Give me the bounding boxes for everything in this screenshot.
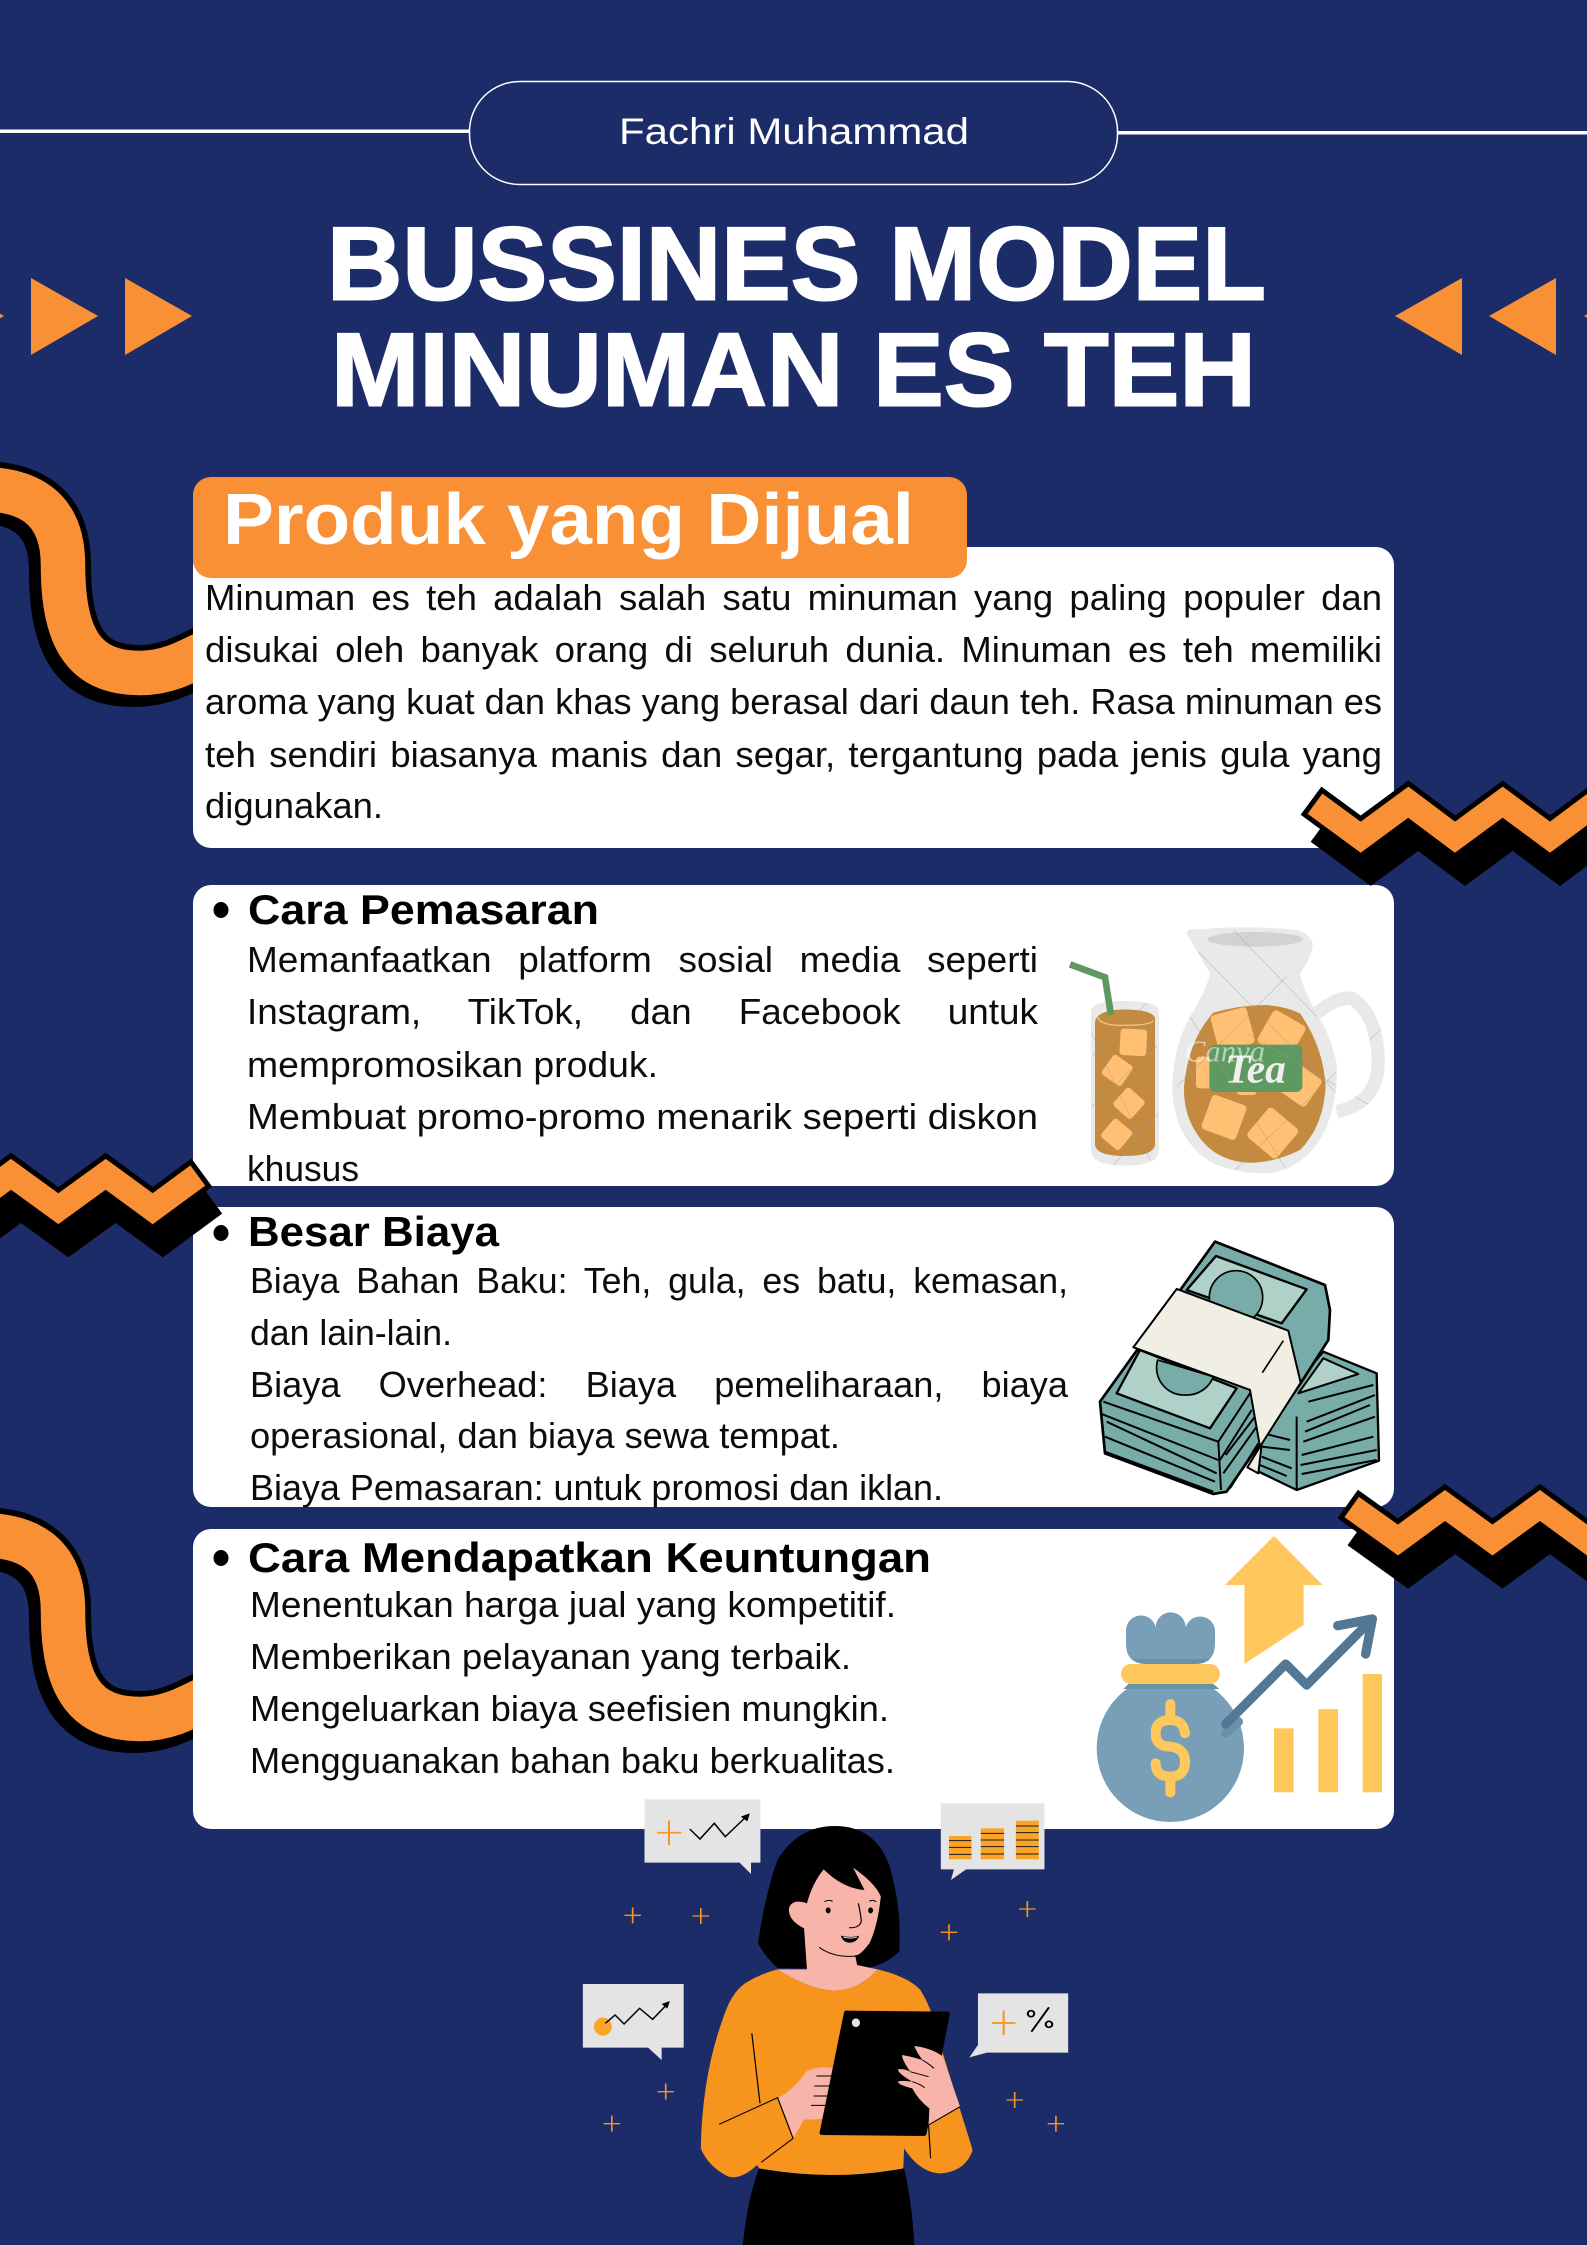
illustration: iced tea glass and jug: Canva xyxy=(1185,1035,1265,1069)
title: MINUMAN ES TEH xyxy=(331,312,1256,428)
panel: cara mendapatkan keuntungan xyxy=(193,1529,1394,1829)
panel: cara pemasaran: Membuat promo-promo menarik seperti diskon xyxy=(247,1096,1038,1137)
speech bubble: percent right xyxy=(969,1993,1068,2057)
speech bubble: line chart top left xyxy=(644,1799,760,1874)
panel: cara mendapatkan keuntungan: Menentukan harga jual yang kompetitif. xyxy=(250,1584,896,1625)
panel: produk yang dijual: Produk yang Dijual xyxy=(223,480,914,560)
illustration: money stacks xyxy=(1100,1242,1379,1494)
panel: besar biaya xyxy=(193,1207,1394,1508)
title xyxy=(327,207,1266,428)
illustration: iced tea glass and jug xyxy=(1070,927,1383,1173)
panel: besar biaya: Biaya Bahan Baku: Teh, gula, es batu, kemasan, xyxy=(250,1260,1068,1301)
panel: produk yang dijual: Minuman es teh adalah salah satu minuman yang paling populer dan xyxy=(205,577,1382,618)
panel: cara pemasaran: Instagram, TikTok, dan Facebook untuk xyxy=(247,991,1039,1032)
author pill xyxy=(470,82,1118,184)
panel: cara mendapatkan keuntungan: Mengeluarkan biaya seefisien mungkin. xyxy=(250,1688,889,1729)
panel: besar biaya: Biaya Overhead: Biaya pemeliharaan, biaya xyxy=(250,1364,1069,1405)
panel: besar biaya: Besar Biaya xyxy=(248,1208,500,1255)
sparkle plus signs xyxy=(604,1901,1064,2132)
panel: cara mendapatkan keuntungan: Mengguanakan bahan baku berkualitas. xyxy=(250,1740,895,1781)
zigzag decoration right top xyxy=(1311,801,1587,864)
illustration: iced tea glass and jug: Tea xyxy=(1225,1047,1286,1093)
arrows right xyxy=(1395,278,1587,355)
author pill: Fachri Muhammad xyxy=(619,111,969,152)
wave decoration top xyxy=(0,489,215,679)
panel: produk yang dijual xyxy=(193,477,1394,848)
panel: cara pemasaran: Cara Pemasaran xyxy=(248,886,599,933)
wave decoration bottom xyxy=(0,1535,215,1725)
illustration: money bag with growth chart xyxy=(1097,1536,1382,1822)
zigzag decoration right bottom xyxy=(1348,1504,1587,1567)
panel: besar biaya: operasional, dan biaya sewa tempat. xyxy=(250,1415,840,1456)
panel: cara pemasaran: khusus xyxy=(247,1148,359,1189)
header rule left xyxy=(0,130,470,133)
illustration: woman with tablet and chart bubbles xyxy=(583,1799,1068,2245)
panel: produk yang dijual: aroma yang kuat dan khas yang berasal dari daun teh. Rasa minuman es xyxy=(205,681,1382,722)
panel: cara mendapatkan keuntungan: Cara Mendapatkan Keuntungan xyxy=(248,1534,931,1581)
panel: produk yang dijual: disukai oleh banyak orang di seluruh dunia. Minuman es teh memiliki xyxy=(205,629,1382,670)
panel: cara pemasaran: mempromosikan produk. xyxy=(247,1044,658,1085)
woman figure xyxy=(701,1826,973,2245)
speech bubble: trend left xyxy=(583,1984,684,2060)
panel: cara pemasaran: Memanfaatkan platform sosial media seperti xyxy=(247,939,1038,980)
zigzag decoration left xyxy=(0,1172,212,1236)
panel: produk yang dijual: teh sendiri biasanya manis dan segar, tergantung pada jenis gula yang xyxy=(205,734,1382,775)
speech bubble: bars top right xyxy=(941,1803,1044,1880)
panel: besar biaya: dan lain-lain. xyxy=(250,1312,452,1353)
header rule right xyxy=(1118,131,1587,134)
panel: produk yang dijual: digunakan. xyxy=(205,785,383,826)
arrows left xyxy=(0,278,192,355)
panel: cara mendapatkan keuntungan: Memberikan pelayanan yang terbaik. xyxy=(250,1636,851,1677)
panel: cara pemasaran xyxy=(193,885,1394,1189)
panel: besar biaya: Biaya Pemasaran: untuk promosi dan iklan. xyxy=(250,1467,943,1508)
title: BUSSINES MODEL xyxy=(327,207,1266,323)
